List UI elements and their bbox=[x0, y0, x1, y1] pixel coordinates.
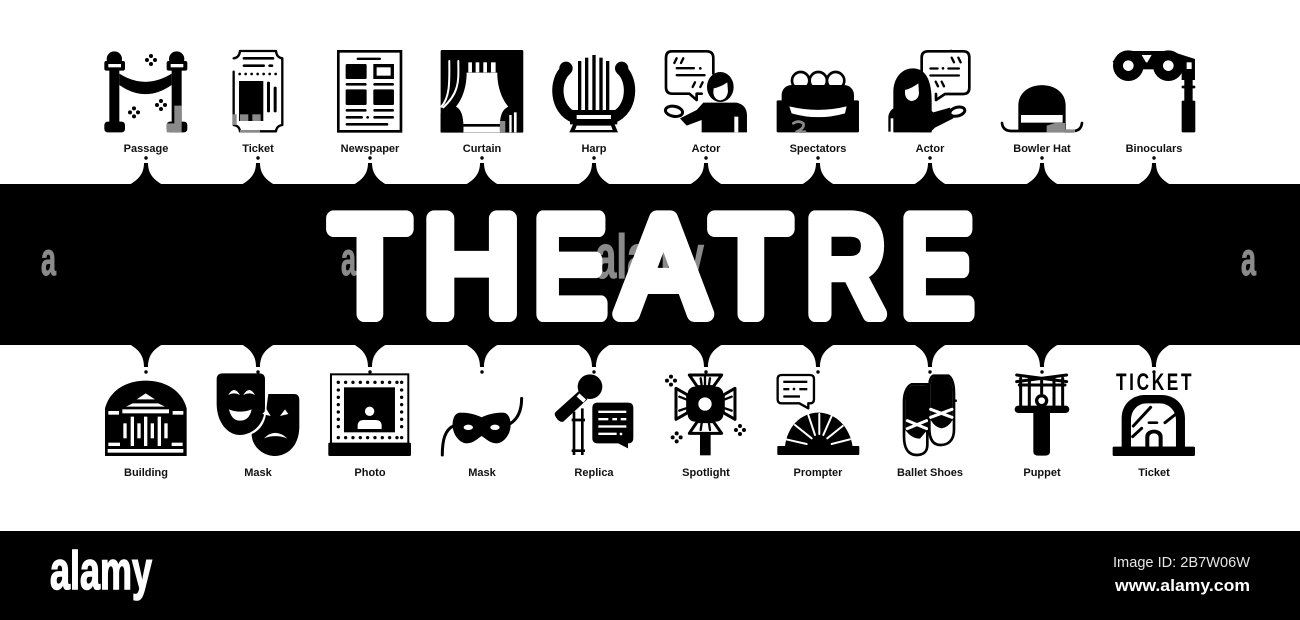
icon: eye mask bbox=[442, 398, 522, 455]
icon: prompter box with bubble bbox=[777, 375, 859, 455]
label: Ticket: Ticket bbox=[1138, 467, 1170, 479]
footer image id: Image ID: 2B7W06W bbox=[1113, 554, 1251, 571]
icon: ballet shoes bbox=[904, 376, 957, 455]
label: Harp: Harp bbox=[581, 143, 607, 155]
title: THEATRE: E bbox=[901, 189, 973, 344]
icon: comedy and tragedy masks bbox=[217, 373, 299, 456]
footer url: www.alamy.com bbox=[1114, 576, 1250, 595]
title: THEATRE: A bbox=[620, 189, 707, 344]
icon: theatre building bbox=[105, 381, 187, 456]
title: THEATRE bbox=[331, 188, 973, 344]
icon: female actor with speech bubble bbox=[888, 50, 969, 132]
label: Actor: Actor bbox=[916, 143, 945, 155]
label: Building: Building bbox=[124, 467, 168, 479]
icon: ticket booth: TICKET bbox=[1116, 369, 1194, 396]
icon: spotlight bbox=[665, 375, 746, 455]
icon: ticket booth bbox=[1113, 369, 1195, 456]
label: Curtain: Curtain bbox=[463, 143, 502, 155]
top connectors bbox=[129, 156, 1171, 185]
label: Puppet: Puppet bbox=[1023, 467, 1061, 479]
icon: bowler hat bbox=[1002, 85, 1082, 132]
title banner bbox=[0, 156, 1300, 374]
icon: newspaper bbox=[338, 51, 401, 131]
icon: passage rope barrier bbox=[104, 51, 187, 132]
footer logo: alamy: alamy bbox=[50, 541, 152, 601]
watermark marks: alamy bbox=[595, 223, 704, 292]
label: Binoculars: Binoculars bbox=[1126, 143, 1182, 155]
watermark marks bbox=[41, 223, 1256, 292]
footer bar bbox=[0, 531, 1300, 620]
label: Spotlight: Spotlight bbox=[682, 467, 730, 479]
watermark marks: a bbox=[41, 233, 56, 285]
title: THEATRE: R bbox=[806, 188, 886, 344]
icon: microphone and replica bubble bbox=[555, 374, 633, 455]
label: Actor: Actor bbox=[692, 143, 721, 155]
title: THEATRE: H bbox=[423, 188, 520, 343]
label: Photo: Photo bbox=[354, 467, 386, 479]
icon: harp bbox=[558, 55, 630, 132]
title: THEATRE: T bbox=[712, 189, 790, 344]
watermark marks: a bbox=[1241, 233, 1256, 285]
bottom connectors bbox=[129, 344, 1171, 374]
icon: spectators on sofa bbox=[777, 72, 859, 132]
label: Passage: Passage bbox=[124, 143, 168, 155]
icon: ticket bbox=[233, 51, 282, 132]
label: Bowler Hat: Bowler Hat bbox=[1013, 143, 1071, 155]
icon: male actor with speech bubble bbox=[665, 51, 747, 132]
icon: curtain bbox=[441, 50, 523, 133]
title: THEATRE: E bbox=[534, 189, 606, 344]
label: Prompter: Prompter bbox=[794, 467, 843, 479]
title: THEATRE: T bbox=[331, 189, 409, 344]
watermark marks: a bbox=[341, 233, 356, 285]
icon: opera binoculars bbox=[1113, 50, 1195, 132]
label: Spectators: Spectators bbox=[790, 143, 846, 155]
label: Replica: Replica bbox=[574, 467, 614, 479]
label: Newspaper: Newspaper bbox=[341, 143, 400, 155]
label: Mask: Mask bbox=[244, 467, 273, 479]
label: Ballet Shoes: Ballet Shoes bbox=[897, 467, 963, 479]
icon: puppet bbox=[1015, 375, 1069, 456]
label: Ticket: Ticket bbox=[242, 143, 274, 155]
label: Mask: Mask bbox=[468, 467, 497, 479]
icon: framed photo bbox=[328, 374, 411, 456]
